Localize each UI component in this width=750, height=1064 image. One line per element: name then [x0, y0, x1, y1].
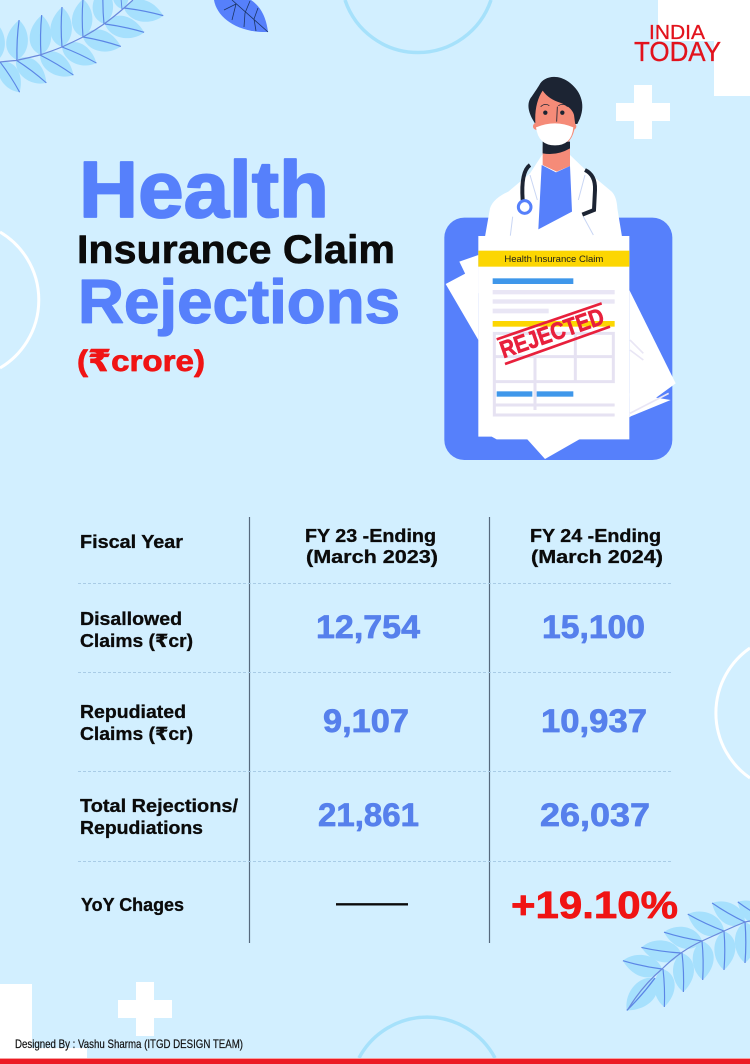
- form lines: [493, 278, 615, 415]
- white corner block: bottom left: [0, 984, 87, 1059]
- row: year on year change: YoY Chages: [81, 895, 184, 915]
- title: Health: [79, 145, 329, 234]
- background circle: bottom: [359, 1017, 495, 1058]
- eyes and brows: [541, 104, 568, 122]
- leaf branch: top left: [0, 0, 165, 97]
- neck and beard: [543, 142, 570, 172]
- row: header: (March 2024): [531, 547, 663, 567]
- row: repudiated claims: Repudiated: [80, 702, 186, 722]
- background circle: right: [716, 648, 750, 778]
- ears: [533, 123, 576, 130]
- footer red bar: [0, 1058, 750, 1064]
- white coat: [485, 155, 622, 237]
- stethoscope: [518, 165, 595, 215]
- leaf: dark blue top: [214, 0, 268, 32]
- row: total rejections: Repudiations: [80, 818, 203, 838]
- row: total rejections: [80, 796, 650, 838]
- row: year on year change: [81, 885, 678, 927]
- row: year on year change: ———: [336, 890, 408, 917]
- row: total rejections: Total Rejections/: [80, 796, 238, 816]
- face mask: [536, 123, 573, 145]
- row: repudiated claims: [80, 702, 647, 744]
- white corner block: top right: [658, 0, 750, 96]
- background circle: top: [345, 0, 491, 53]
- row: header: FY 24 -Ending: [530, 526, 661, 546]
- hair: [528, 77, 582, 124]
- title: (₹crore): [77, 345, 205, 378]
- logo: India Today: INDIA: [649, 22, 706, 44]
- face: [535, 91, 575, 142]
- title: Rejections: [78, 268, 400, 337]
- form heading: Health Insurance Claim: [504, 254, 604, 264]
- row: repudiated claims: 10,937: [541, 703, 647, 739]
- row: disallowed claims: 12,754: [316, 609, 420, 645]
- back papers: [446, 255, 676, 459]
- icon: plus top right: [616, 85, 670, 139]
- row: repudiated claims: Claims (₹cr): [80, 724, 193, 744]
- scrub top: [538, 165, 572, 229]
- rejected stamp: REJECTED: [496, 303, 608, 364]
- panel: blue rounded backdrop: [444, 218, 672, 460]
- row: year on year change: +19.10%: [511, 885, 678, 927]
- head: [528, 77, 582, 145]
- illustration: doctor holding rejected claim form: [444, 77, 676, 460]
- title: [77, 145, 400, 378]
- yellow header band: [478, 251, 629, 267]
- row: disallowed claims: 15,100: [542, 609, 645, 645]
- table: [78, 517, 678, 943]
- logo: India Today: [634, 22, 721, 67]
- row: disallowed claims: Disallowed: [80, 609, 182, 629]
- row: total rejections: 21,861: [318, 797, 419, 833]
- coat seams: [510, 175, 593, 236]
- title: Insurance Claim: [77, 228, 395, 272]
- paper: [478, 236, 629, 439]
- row: header: FY 23 -Ending: [305, 526, 436, 546]
- row: header: (March 2023): [306, 547, 438, 567]
- row: header: Fiscal Year: [80, 532, 183, 552]
- leaf branch: bottom right: [619, 894, 750, 1019]
- row: disallowed claims: Claims (₹cr): [80, 631, 193, 651]
- icon: plus bottom left: [118, 982, 172, 1036]
- claim form sheet: [478, 236, 629, 439]
- table dividers: [78, 517, 673, 943]
- row: total rejections: 26,037: [540, 797, 650, 833]
- row: repudiated claims: 9,107: [323, 703, 409, 739]
- row: header: [80, 526, 663, 567]
- doctor: [485, 77, 622, 237]
- logo: India Today: TODAY: [634, 36, 721, 67]
- row: disallowed claims: [80, 609, 645, 651]
- background circle: left: [0, 232, 39, 368]
- credit line: Designed By : Vashu Sharma (ITGD DESIGN TEAM): [15, 1037, 243, 1051]
